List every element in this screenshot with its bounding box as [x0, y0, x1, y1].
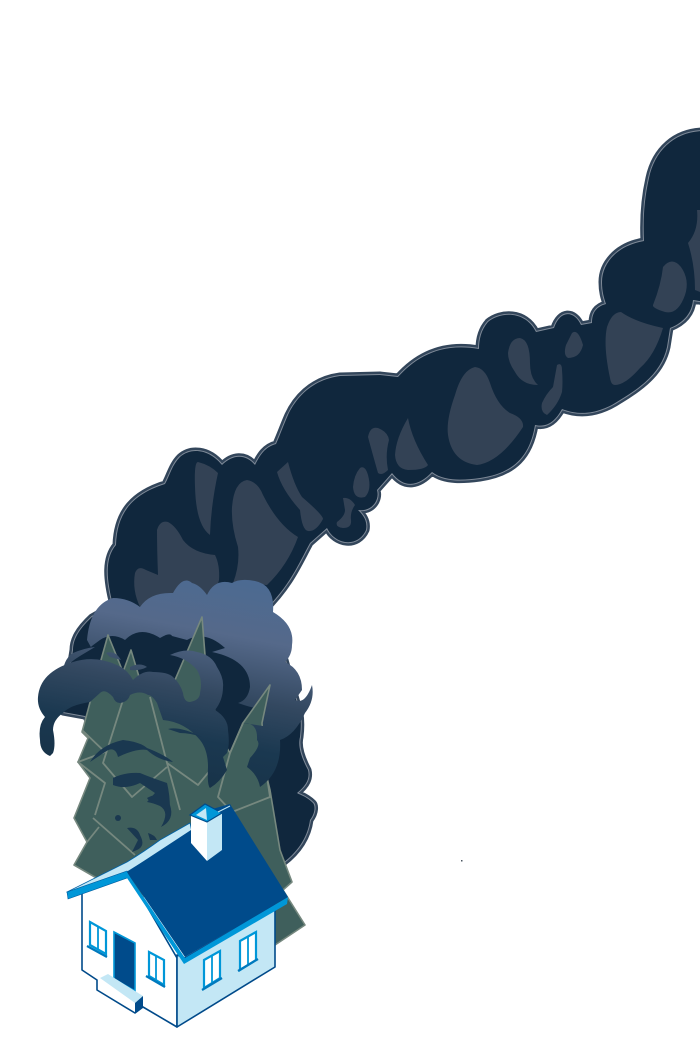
window right wall 2: [238, 932, 258, 971]
chimney: [190, 804, 230, 861]
dark hollow inside the crown: [75, 632, 263, 765]
speck: [461, 860, 462, 862]
window left wall 2: [146, 952, 165, 987]
door: [114, 932, 135, 991]
window left wall 1: [87, 922, 107, 957]
plume highlights: [134, 210, 700, 607]
house right wall: [177, 905, 275, 1027]
door step: [100, 974, 143, 1013]
roof front edge: [125, 871, 288, 964]
smoke crown: [75, 580, 313, 765]
forest of trees: [74, 617, 305, 945]
roof eave strip: [67, 871, 130, 899]
roof: [127, 804, 288, 957]
roof overhang: [67, 823, 192, 893]
house left wall: [82, 872, 177, 1027]
house: [67, 804, 288, 1027]
dark smoke wisps over trees: [90, 728, 202, 852]
tree branch lines: [78, 697, 270, 855]
window right wall 1: [202, 951, 222, 990]
smoke plume: [63, 131, 700, 863]
front smoke billows: [38, 647, 280, 788]
